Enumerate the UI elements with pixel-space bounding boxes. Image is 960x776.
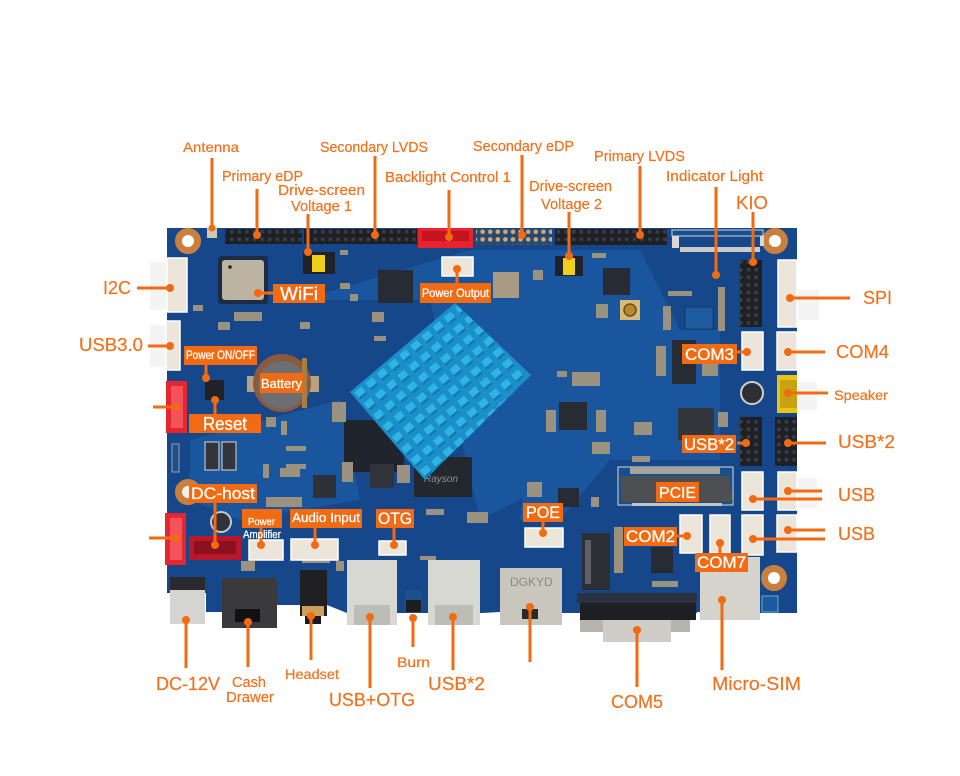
faint photo halo (150, 262, 819, 508)
callout: USB*2 bottom: USB*2 (428, 674, 485, 694)
on-board label: POE: POE (526, 503, 560, 522)
circuit board photo (165, 228, 797, 642)
on-board label: Battery: Battery (261, 376, 302, 391)
callout: SPI: SPI (863, 288, 892, 308)
callout: Speaker: Speaker (834, 387, 888, 403)
callout: Drive-screen Voltage 1 (278, 182, 365, 215)
callout: Backlight Control 1: Backlight Control 1 (385, 169, 511, 186)
board substrate (167, 228, 797, 613)
on-board label: Power Output: Power Output (422, 288, 490, 300)
on-board label: Reset (189, 414, 261, 434)
coin cell battery holder (247, 354, 319, 412)
on-board label: OTG: OTG (378, 509, 412, 528)
callout: Micro-SIM: Micro-SIM (712, 674, 801, 694)
callout: Cash Drawer: Cash (232, 674, 266, 691)
on-board label: WiFi (273, 284, 325, 304)
leader: left edge (137, 284, 398, 549)
callout: Burn: Burn (397, 654, 430, 670)
callout: COM5: COM5 (611, 692, 663, 712)
small components (193, 250, 728, 587)
callout: Indicator Light: Indicator Light (666, 168, 764, 185)
PCIe slot (618, 467, 733, 506)
callout: Drive-screen Voltage 1: Voltage 1 (291, 198, 352, 215)
on-board label: Power Amplifier (242, 509, 282, 541)
on-board label: Power Amplifier: Power (248, 517, 276, 528)
on-board label: WiFi: WiFi (280, 284, 318, 304)
on-board label: USB*2: USB*2 (684, 436, 734, 454)
bottom connectors: DGKYD (510, 575, 553, 589)
on-board label: COM7: COM7 (697, 554, 746, 572)
chips (205, 268, 763, 590)
callout: Cash Drawer: Drawer (226, 689, 274, 706)
callout: Antenna: Antenna (183, 139, 239, 155)
callout: Drive-screen Voltage 2: Drive-screen (529, 178, 612, 195)
leader: bottom edge (182, 596, 726, 688)
right edge connectors (680, 260, 797, 555)
on-board label: Power ON/OFF: Power ON/OFF (186, 350, 255, 362)
bottom connectors (170, 528, 778, 642)
on-board label: PCIE: PCIE (659, 485, 696, 502)
on-board label: Audio Input: Audio Input (292, 510, 360, 525)
on-board label: COM3: COM3 (685, 345, 734, 364)
mounting holes (178, 232, 784, 588)
copper trace areas (190, 250, 720, 520)
leader lines and dots (137, 155, 850, 688)
chips: Rayson (424, 474, 458, 485)
callout: USB+OTG: USB+OTG (329, 690, 415, 710)
callout: KIO: KIO (736, 193, 768, 213)
callout: I2C: I2C (103, 278, 131, 298)
left edge connectors (165, 258, 187, 565)
callout: Primary eDP: Primary eDP (222, 168, 303, 185)
callout: Cash Drawer (226, 674, 274, 706)
WiFi module (218, 256, 268, 304)
callout: USB upper: USB (838, 485, 875, 505)
on-board label: Power Amplifier: Amplifier (243, 529, 281, 541)
callout: DC-12V: DC-12V (156, 674, 220, 694)
on-board label: COM2: COM2 (626, 528, 675, 546)
callout: USB*2 right: USB*2 (838, 432, 895, 452)
callout: Drive-screen Voltage 2 (529, 178, 612, 213)
callout: USB lower: USB (838, 524, 875, 544)
callout: Drive-screen Voltage 2: Voltage 2 (541, 196, 602, 213)
leader: right edge (539, 294, 850, 553)
callout: Secondary LVDS: Secondary LVDS (320, 139, 428, 156)
callout: COM4: COM4 (836, 342, 889, 362)
top connectors (207, 228, 764, 276)
leader: top edge (208, 155, 757, 283)
callout: Primary LVDS: Primary LVDS (594, 148, 685, 165)
on-board label: Reset: Reset (203, 414, 247, 434)
on-board label: DC-host: DC-host (191, 484, 255, 503)
on-board label: Power Output (420, 283, 491, 303)
callout: Headset: Headset (285, 666, 339, 682)
heat sink (350, 303, 531, 480)
callout: USB3.0: USB3.0 (79, 335, 143, 355)
on-board label: Power ON/OFF (184, 346, 257, 365)
callout: Drive-screen Voltage 1: Drive-screen (278, 182, 365, 199)
callout: Secondary eDP: Secondary eDP (473, 138, 574, 155)
